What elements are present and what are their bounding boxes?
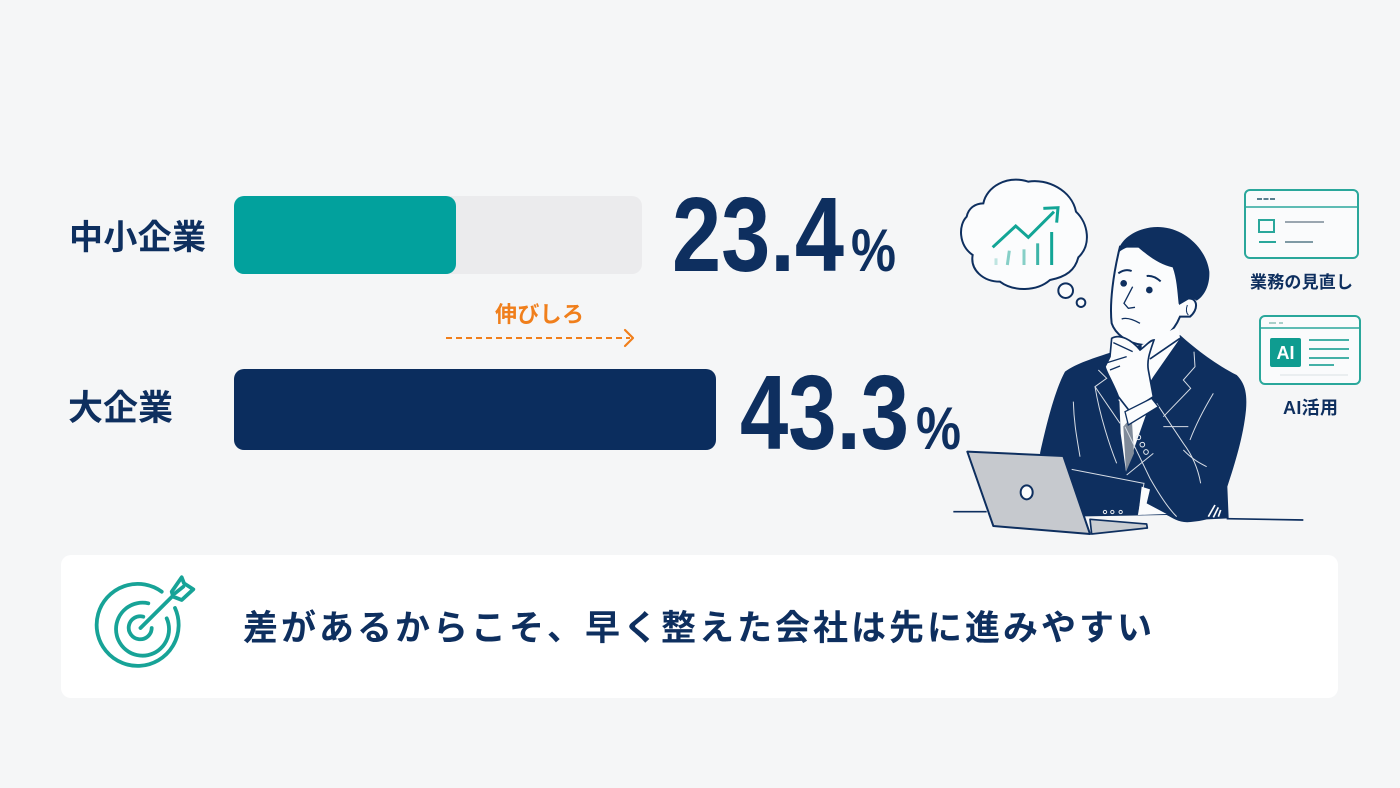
shirt stripes xyxy=(1208,505,1221,517)
lower cuff and hand xyxy=(1138,487,1167,515)
sleeve buttons xyxy=(1136,435,1148,454)
label: AI活用: AI活用 xyxy=(1283,398,1338,418)
jacket lines xyxy=(1072,352,1213,517)
callout panel xyxy=(61,555,1338,698)
annotation: 伸びしろ arrow: 伸びしろ xyxy=(495,302,584,327)
neck xyxy=(1142,327,1180,360)
value: 23.4%: % xyxy=(851,217,896,284)
value: 43.3%: % xyxy=(916,395,961,462)
bar: 中小企業 23.4% xyxy=(234,196,642,274)
cuff xyxy=(1125,398,1158,425)
icon: 業務の見直し window xyxy=(1245,190,1358,258)
hand on chin xyxy=(1105,337,1154,412)
annotation: 伸びしろ arrow xyxy=(446,302,633,346)
face details xyxy=(1118,270,1188,323)
label: 大企業: 大企業 xyxy=(68,389,173,428)
bar: 大企業 43.3% xyxy=(234,369,716,450)
sleeve buttons near laptop xyxy=(1103,510,1122,514)
laptop xyxy=(967,452,1147,534)
label: 業務の見直し: 業務の見直し xyxy=(1250,273,1353,292)
icon: AI活用 window xyxy=(1260,316,1360,384)
value: 43.3%: 43.3 xyxy=(740,354,909,472)
thought bubble with growth chart xyxy=(961,180,1087,307)
shirt and tie xyxy=(1118,338,1180,413)
table line xyxy=(953,512,1303,520)
icon: AI活用 window: AI xyxy=(1276,343,1294,363)
value: 23.4%: 23.4 xyxy=(672,176,844,294)
callout text: 差があるからこそ、早く整えた会社は先に進みやすい xyxy=(243,609,1152,648)
jacket xyxy=(1040,335,1246,522)
head xyxy=(1111,247,1196,345)
label: 中小企業: 中小企業 xyxy=(69,219,206,257)
icon: target with arrow xyxy=(97,577,193,666)
illustration: thinking businessman xyxy=(953,180,1303,534)
hair xyxy=(1118,227,1209,304)
